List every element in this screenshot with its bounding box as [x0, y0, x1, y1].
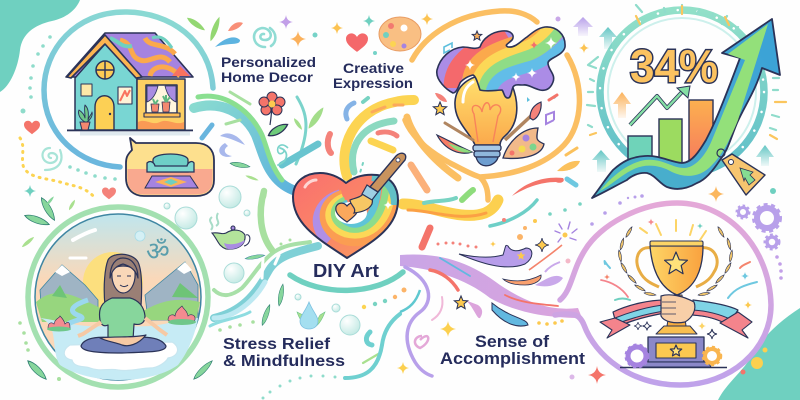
- dot trails: [18, 35, 622, 399]
- icon: cloud: [64, 342, 178, 371]
- stream splashes: [397, 222, 606, 384]
- figure: meditating person: [78, 254, 167, 353]
- heading: creative expression: [333, 60, 413, 91]
- stream: home to heart: [194, 92, 293, 190]
- big number 34%: 34%: [630, 40, 718, 92]
- heading: sense of accomplishment: [440, 333, 586, 368]
- small icons: top decorations: [185, 15, 377, 55]
- decorative plant: [278, 97, 326, 165]
- scene: sun and mountains: ॐ: [146, 237, 170, 267]
- brush: [350, 193, 372, 213]
- trend arrow: [630, 92, 682, 125]
- blob: bottom-right corner: [718, 308, 800, 400]
- stream: right of heart to bulb: [403, 148, 580, 247]
- icon: house: [66, 33, 193, 136]
- big growth arrow: [592, 19, 780, 198]
- heading: sense of accomplishment: Sense of: [475, 333, 550, 351]
- icon: price tag: [717, 149, 765, 195]
- ring: growth: [600, 10, 764, 174]
- ring: home: [44, 12, 213, 167]
- icon: brushes and palette: [421, 13, 589, 158]
- icon: flower: [259, 92, 289, 139]
- icon: paint splash: [437, 20, 567, 98]
- heading: stress relief and mindfulness: [223, 336, 345, 370]
- panel: personalized home decor: [44, 12, 214, 196]
- icon: laurels: [618, 226, 733, 296]
- icon: light bulb: [455, 74, 517, 166]
- panel: sense of accomplishment: [397, 203, 771, 385]
- icon: trophy: [600, 241, 752, 367]
- heading: creative expression: Creative: [343, 60, 404, 76]
- stream: stress relief to heart: [210, 242, 318, 326]
- small decorations: [573, 5, 786, 202]
- speech bubble: sofa: [126, 138, 214, 196]
- green line beside heart: [261, 191, 272, 250]
- arc under DIY Art: [290, 272, 403, 290]
- hand: [661, 295, 695, 323]
- heading: sense of accomplishment: Accomplishment: [440, 350, 586, 368]
- heading: personalized home decor: Personalized: [221, 54, 316, 70]
- dots: right side: [740, 255, 783, 374]
- center heart with brush: [293, 153, 406, 258]
- stream: rainbow arcs above heart: [328, 98, 458, 190]
- panel: 34 percent growth: [573, 5, 786, 202]
- heading: personalized home decor: [221, 54, 316, 85]
- scene: sun and mountains: [36, 230, 200, 380]
- heading: personalized home decor: Home Decor: [221, 69, 314, 85]
- icon: teapot: [210, 213, 250, 249]
- ribbon: [613, 300, 665, 327]
- heading: creative expression: Expression: [333, 75, 413, 91]
- blob: top-left corner: [0, 0, 80, 92]
- icon: confetti and rays: [601, 218, 757, 339]
- icon: gears: [736, 204, 780, 250]
- icon: water drop: [297, 302, 325, 329]
- bar chart: [628, 100, 713, 165]
- icon: lotus flowers: [47, 306, 196, 332]
- stream: purple ribbon: [400, 254, 582, 318]
- ring: trophy: [555, 203, 771, 385]
- white highlight and red line on ribbon: [440, 258, 558, 306]
- icon: palette: [379, 17, 421, 51]
- heading: stress relief and mindfulness: Stress Relief: [223, 336, 331, 353]
- small icons: bubbles, teapot and leaves: [21, 121, 400, 381]
- heading: stress relief and mindfulness: & Mindfulness: [223, 353, 345, 370]
- panel: creative expression: [405, 11, 589, 200]
- panel: stress relief and mindfulness: [28, 207, 208, 387]
- ring: bulb: [405, 11, 579, 200]
- heading: DIY Art: DIY Art: [313, 261, 379, 281]
- ring: meditation bubble: [28, 207, 208, 387]
- icon: small gears: [626, 345, 721, 367]
